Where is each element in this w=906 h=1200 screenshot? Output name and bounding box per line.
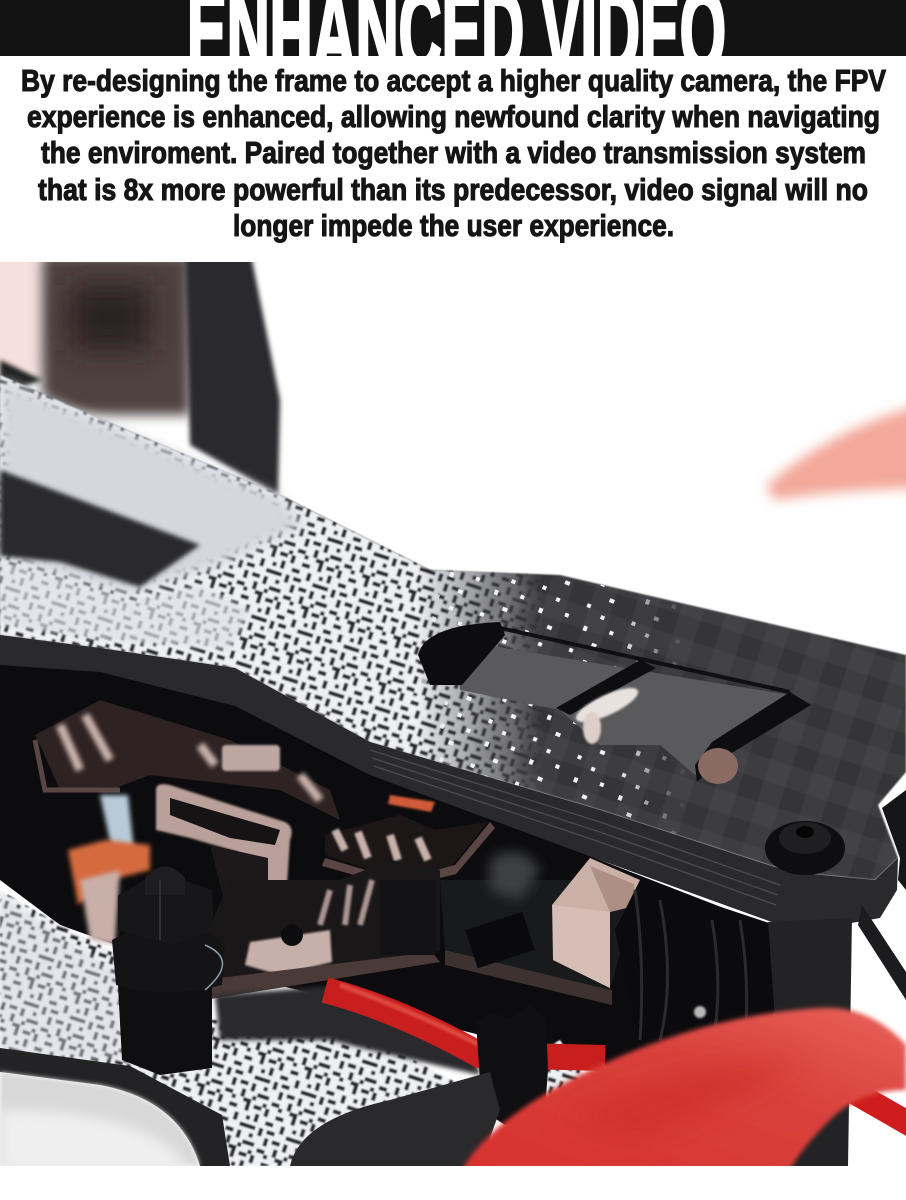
body paragraph: longer impede the user experience.	[233, 208, 674, 243]
body paragraph	[21, 63, 886, 243]
battery-strap window	[418, 622, 811, 784]
white JST connector	[552, 858, 640, 988]
title banner	[0, 0, 906, 56]
slot cutout in plate, left	[0, 470, 200, 587]
standoff, right	[768, 918, 852, 1166]
black M3 screw head	[765, 821, 845, 875]
bottom-left dark plate edge	[0, 1048, 500, 1170]
pale blurred plate area, left	[0, 378, 305, 595]
black wires bundle	[615, 880, 775, 1050]
blurred red propeller, top right	[766, 405, 906, 500]
red silicone wire	[325, 985, 906, 1130]
right black strut	[858, 905, 906, 1000]
USB-C port	[154, 782, 294, 896]
lower plate: speckled surface	[0, 890, 600, 1166]
product photo: drone frame close-up	[0, 250, 906, 1170]
lower PCB	[186, 860, 612, 1005]
large red propeller blade	[462, 1008, 906, 1170]
front-left plastic standoff and nut	[112, 866, 225, 1075]
plate edge laminate	[0, 635, 898, 925]
flight controller board	[35, 700, 495, 888]
light-blue antenna and orange pad	[68, 795, 150, 945]
blurred background: camera and dark strut	[0, 250, 280, 495]
top plate: speckled surface	[0, 375, 906, 880]
dark ESC chip board	[440, 852, 640, 990]
lower plate dark underside	[215, 985, 480, 1075]
small zip tie standoff	[476, 1034, 548, 1125]
dark electronics bay background	[0, 640, 780, 1080]
right dark motor shape	[882, 790, 906, 890]
